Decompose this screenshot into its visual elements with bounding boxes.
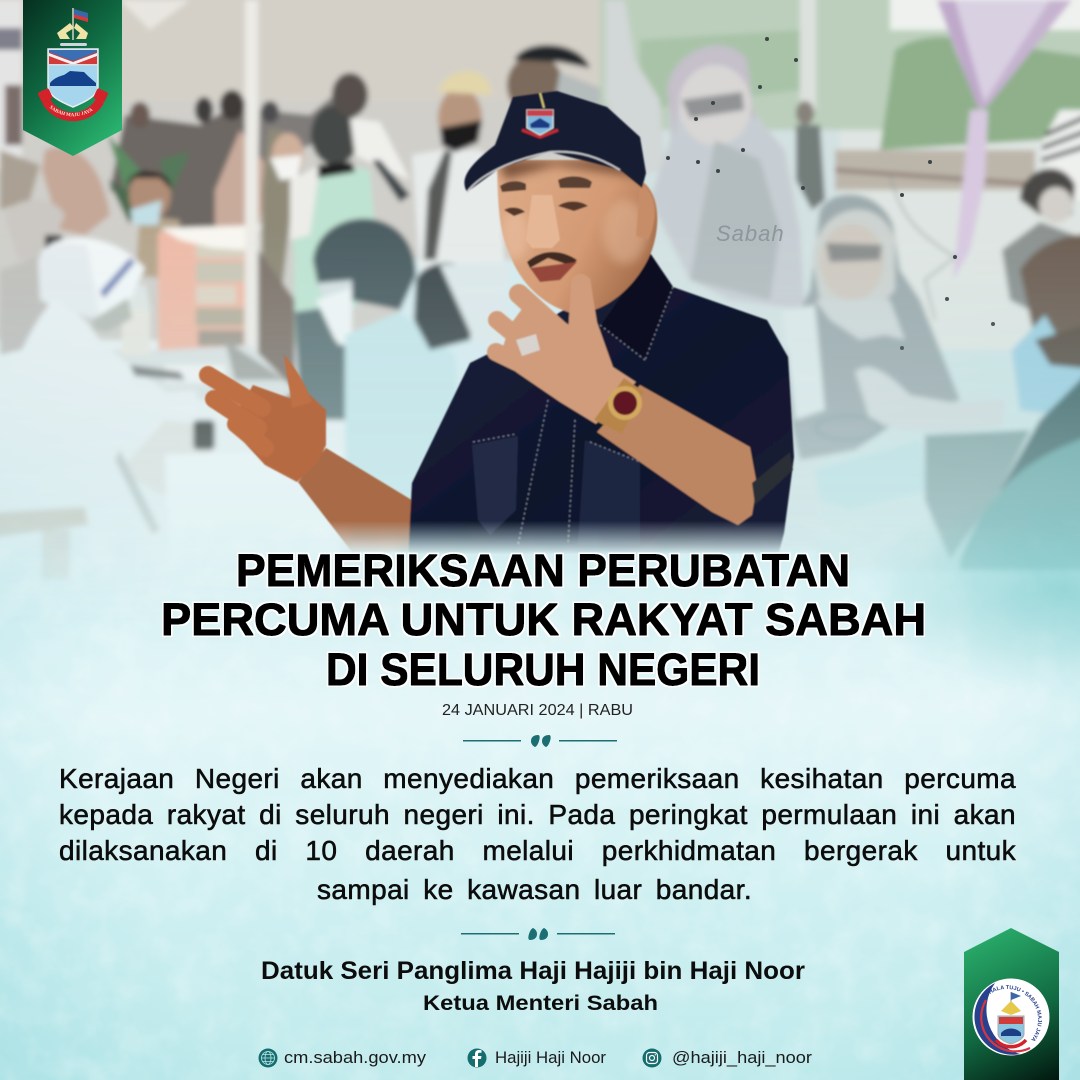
footer: facebook: Hajiji Haji Noor xyxy=(495,1048,606,1067)
ear xyxy=(636,185,655,240)
right nurse in brown scarf xyxy=(998,232,1080,492)
minister name: Datuk Seri Panglima Haji Hajiji bin Haji Noor xyxy=(261,957,805,985)
sleeve cuff xyxy=(752,452,793,505)
shirt xyxy=(408,253,794,556)
girl with short hair xyxy=(1002,169,1075,320)
icon: Hala Tuju round logo: HALA TUJU • SABAH MAJU JAYA xyxy=(990,985,1042,1041)
tent backdrop xyxy=(0,0,620,110)
desk xyxy=(165,454,210,494)
cap xyxy=(464,91,646,192)
striped shirt person xyxy=(1040,110,1080,200)
badge: state crest ribbon xyxy=(23,0,122,156)
body text: dilaksanakan di 10 daerah melalui perkhidmatan bergerak untuk xyxy=(59,835,1016,866)
crowd xyxy=(110,100,250,230)
his right hand and arm xyxy=(208,355,424,552)
map lines xyxy=(892,187,956,318)
footer: instagram: @hajiji_haji_noor xyxy=(672,1048,812,1067)
minister title: Ketua Menteri Sabah xyxy=(423,992,658,1015)
badge: Hala Tuju ribbon xyxy=(964,928,1059,1080)
neck and face xyxy=(497,160,657,314)
shelves xyxy=(158,225,262,352)
table and instruments xyxy=(118,342,291,399)
title: DI SELURUH NEGERI xyxy=(326,644,760,695)
icon: Hala Tuju round logo xyxy=(972,978,1050,1056)
seated man foreground xyxy=(291,215,457,498)
wrist watch xyxy=(594,378,644,434)
man in mint polo xyxy=(290,105,378,345)
curtain xyxy=(937,0,1072,280)
body text xyxy=(59,763,1016,906)
quote divider top xyxy=(463,735,617,747)
man: chief minister portrait xyxy=(208,91,794,556)
title: PERCUMA UNTUK RAKYAT SABAH xyxy=(161,594,926,645)
gloved arm xyxy=(817,444,924,506)
small background man xyxy=(796,101,825,210)
forearm xyxy=(597,385,757,525)
icon: Sabah crest: SABAH MAJU JAYA xyxy=(50,106,93,116)
lawn steps xyxy=(835,150,1035,190)
dark bag xyxy=(414,263,476,350)
patient with mask xyxy=(127,170,180,280)
seated woman with blood-pressure cuff xyxy=(788,192,961,461)
body text: Kerajaan Negeri akan menyediakan pemeriksaan kesihatan percuma xyxy=(59,763,1016,794)
grey hijab woman xyxy=(40,204,66,239)
footer: website: cm.sabah.gov.my xyxy=(284,1048,427,1067)
background photo: medical check-up crowd xyxy=(0,0,1080,640)
woman in patterned scarf xyxy=(262,129,304,290)
garden and map backdrop xyxy=(600,0,1080,130)
raised hand xyxy=(502,278,636,424)
nurse xyxy=(22,235,218,492)
left wall panel xyxy=(0,0,22,170)
map dots xyxy=(666,37,995,350)
body text: sampai ke kawasan luar bandar. xyxy=(317,874,752,905)
standing man in white tee xyxy=(412,71,505,280)
icon: Sabah crest xyxy=(38,8,108,122)
title xyxy=(161,545,926,695)
map watermark: Sabah xyxy=(716,221,785,246)
tent pole xyxy=(245,0,258,350)
body text: kepada rakyat di seluruh negeri ini. Pada peringkat permulaan ini akan xyxy=(59,799,1016,830)
date: 24 JANUARI 2024 | RABU xyxy=(442,702,633,719)
white shirt bystander xyxy=(605,0,665,175)
hijab woman pale xyxy=(650,45,805,310)
teal wash lower right xyxy=(860,490,1080,690)
chair xyxy=(0,507,88,538)
quote divider bottom xyxy=(461,928,615,940)
black hat man xyxy=(504,42,602,104)
man behind with phone xyxy=(332,73,410,202)
cap emblem xyxy=(522,93,558,137)
title: PEMERIKSAAN PERUBATAN xyxy=(236,545,850,596)
